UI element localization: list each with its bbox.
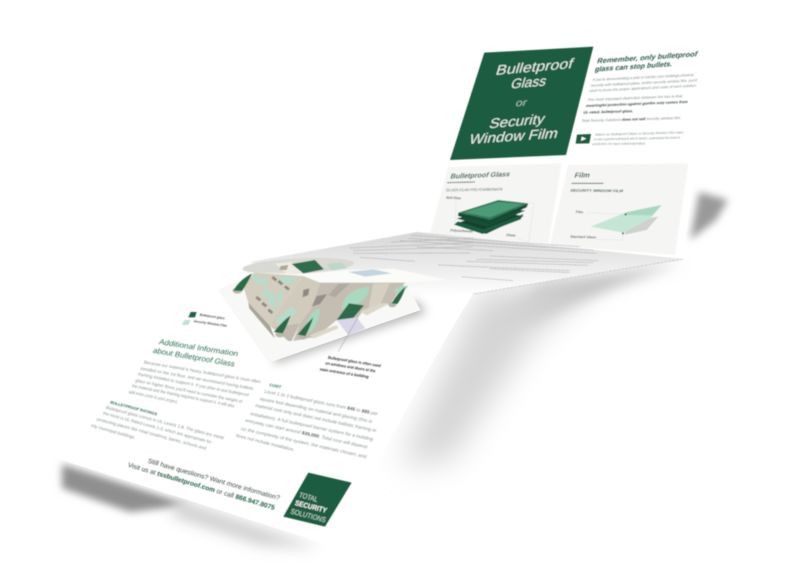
intro paragraph: glass on higher floors you'll need to consider the weight of	[135, 378, 244, 404]
roof	[242, 255, 448, 284]
left wing wall	[243, 273, 303, 339]
layered glass diagram	[454, 200, 528, 234]
intro paragraph: Because our material is heavy, bulletproof glass is most often	[143, 359, 262, 384]
bulletproof ratings: city municipal buildings.	[90, 423, 136, 440]
bulletproof ratings: BULLETPROOF RATINGS	[110, 400, 158, 417]
intro text column	[576, 49, 699, 146]
intro text column: The most important distinction between the two is that	[587, 94, 684, 102]
cost: does not include installation.	[235, 433, 295, 452]
cost: on the complexity of the system, the materials chosen, and	[240, 426, 368, 459]
intro text column: need to know the proper applications and costs of each solution.	[589, 84, 698, 93]
cost: COST	[269, 383, 282, 389]
logo: total security solutions: TOTAL	[298, 490, 319, 504]
bulletproof ratings	[90, 400, 225, 451]
trees	[233, 273, 406, 340]
panel title text: or	[514, 98, 529, 109]
heading: Additional Information	[158, 337, 240, 358]
video caption: Watch our Bulletproof Glass vs Security Window Film video	[595, 131, 684, 137]
top sheet	[417, 42, 712, 259]
front facade	[293, 283, 408, 341]
bulletproof ratings: Bulletproof glass comes in UL Levels 1-8. The glass are metal	[105, 405, 225, 440]
film diagram labels	[570, 210, 597, 239]
panel title text	[467, 56, 575, 148]
intro text column: If you're demonstrating a plan to harden your buildings physical	[592, 73, 694, 82]
intro text column: meaningful protection against gunfire only comes from	[585, 100, 689, 108]
intro text column: Remember, only bulletproof	[596, 49, 699, 65]
closing call to action: Visit us at tssbulletproof.com or call 866.947.8075	[127, 462, 276, 512]
paper shadows	[62, 192, 728, 548]
intro text column: glass can stop bullets.	[594, 59, 674, 74]
cost: Level 1 to 3 bulletproof glass runs from $45 to $85 per	[264, 389, 379, 416]
legend	[182, 312, 228, 328]
cost: square foot depending on material and glazing (this is	[259, 396, 374, 424]
heading	[152, 337, 240, 369]
panel: bulletproof glass	[430, 163, 562, 244]
panel: film: Film	[573, 171, 591, 180]
intro paragraph: framing installed to support it. If you plan to put bulletproof	[137, 371, 250, 397]
building callout: on windows and doors at the	[325, 360, 377, 373]
diagram labels	[446, 196, 516, 237]
panel: bulletproof glass: Bulletproof Glass	[449, 170, 511, 181]
additional information text	[90, 337, 379, 527]
diagram labels: Polycarbonate	[450, 228, 473, 233]
building	[233, 255, 448, 341]
film diagram labels: Standard Glass	[570, 235, 597, 239]
closing call to action: Still have questions? Want more information?	[147, 458, 281, 502]
panel title text: Security	[487, 112, 548, 132]
intro text column: Total Security Solutions does not sell security window film.	[581, 116, 682, 123]
diagram labels: Glass	[506, 233, 516, 237]
heading: about Bulletproof Glass	[152, 346, 237, 369]
lower sheet	[62, 280, 473, 546]
cost: entryway can start around $35,000. Total cost will depend	[245, 418, 368, 449]
building illustration card	[218, 255, 448, 364]
intro paragraph: add extra costs to your project.	[128, 389, 179, 404]
panel title text: Bulletproof	[494, 56, 575, 79]
legend: Bulletproof glass	[199, 313, 225, 320]
bulletproof ratings: the most is UL Rated Levels 1-3, which are appropriate for	[102, 411, 213, 445]
legend: Security Window Film	[193, 319, 228, 328]
intro text column: security with bulletproof glass, and/or security window film, you'll	[590, 78, 698, 88]
video caption: protection for each solution/product.	[592, 142, 647, 146]
panel: bulletproof glass: GLASS-CLAD POLYCARBONATE	[445, 188, 504, 192]
panel title text: Window Film	[467, 126, 560, 148]
logo: total security solutions	[283, 473, 352, 527]
icon: video play button	[576, 134, 591, 144]
bulletproof ratings: protecting places like retail locations, banks, schools and	[96, 417, 208, 451]
panel: film: SECURITY WINDOW FILM	[570, 189, 624, 193]
intro paragraph	[128, 359, 262, 409]
building callout: Bulletproof glass is often used	[327, 355, 382, 368]
building callout: main entrance of a building	[319, 366, 370, 379]
green title panel	[450, 47, 593, 160]
logo: total security solutions: SOLUTIONS	[289, 507, 327, 524]
diagram labels: Multi Glass	[446, 196, 461, 200]
folded band	[250, 232, 683, 298]
logo: total security solutions: SECURITY	[294, 498, 328, 515]
cost: material cost only and does not include ballistic framing or	[255, 403, 378, 433]
center wing wall	[270, 276, 320, 341]
film diagram labels: Film	[575, 210, 584, 214]
film diagram	[587, 205, 662, 240]
building callout	[319, 318, 382, 379]
cost: installation). A full bulletproof barrier system for a building	[250, 411, 375, 442]
video caption	[592, 131, 684, 146]
intro paragraph: installed on the 1st floor, and we recommend having ballistic	[140, 366, 255, 391]
intro paragraph: the material and the framing required to support it. It will also	[131, 383, 236, 409]
intro text column: UL-rated, bulletproof glass.	[583, 109, 634, 115]
entrance door	[337, 303, 364, 320]
panel: film	[550, 163, 688, 255]
cost	[235, 383, 379, 459]
panel title text: Glass	[509, 74, 549, 93]
walkway	[337, 317, 365, 335]
video caption: to see a gunfire-withstand test & tactics, understand the level of	[593, 136, 681, 141]
